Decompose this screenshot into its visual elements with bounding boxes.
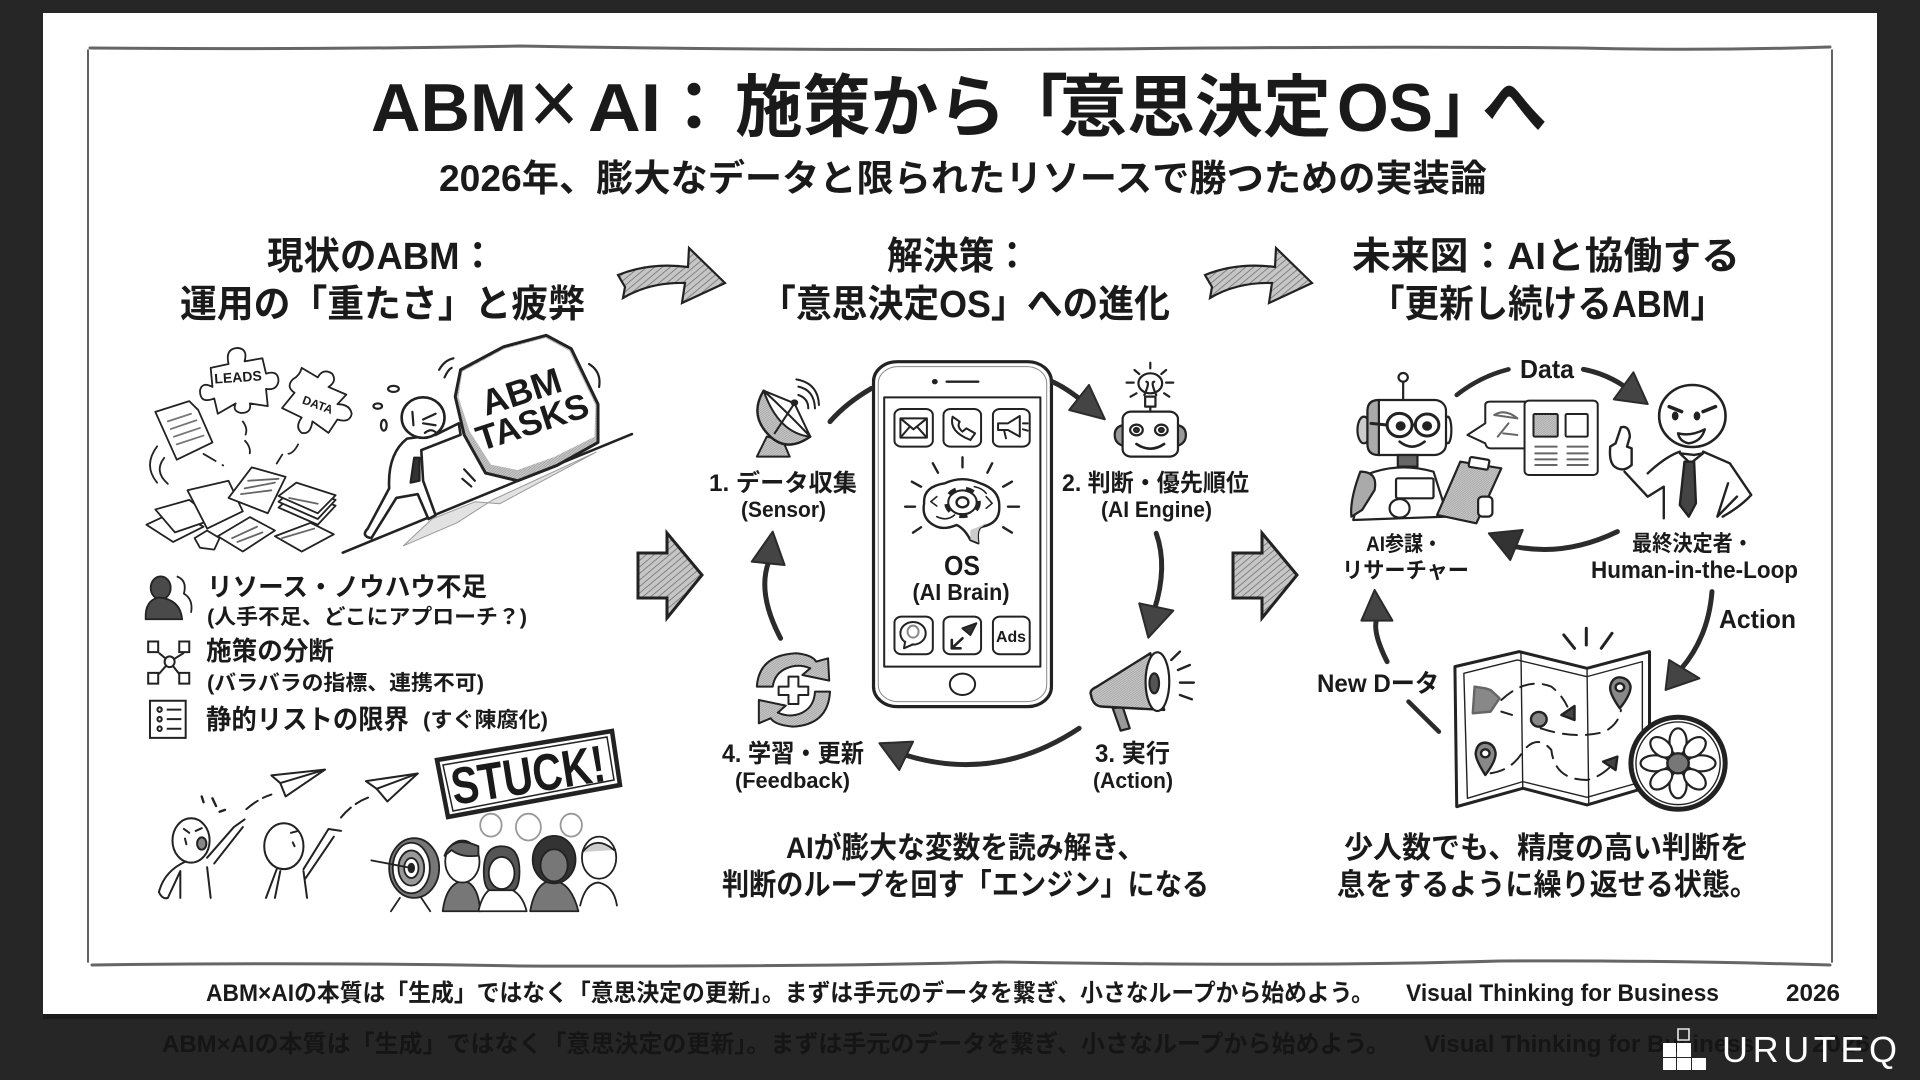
heading: future bbox=[1352, 236, 1740, 326]
caption: engine: AIが膨大な変数を読み解き、 bbox=[786, 831, 1145, 865]
illustration: person pushing boulder uphill bbox=[343, 335, 632, 553]
title: 施策から bbox=[735, 70, 1006, 146]
title bbox=[371, 52, 1547, 154]
heading: current ABM bbox=[180, 236, 585, 326]
label: step 4 bbox=[722, 740, 864, 793]
heading: current ABM: 現状のABM： bbox=[267, 236, 496, 278]
footer reflection on dark background: ABM×AIの本質は「生成」ではなく「意思決定の更新」。まずは手元のデータを繋ぎ、小さなループから始めよう。 bbox=[162, 1030, 1390, 1058]
chart bubble: dashboard bbox=[1467, 401, 1598, 475]
list item: siloed tactics: 施策の分断 bbox=[206, 636, 334, 666]
title: ： bbox=[660, 70, 728, 146]
label: OS (AI Brain): OS bbox=[944, 550, 980, 581]
icon: network bbox=[148, 641, 189, 684]
footer reflection on dark background: 2026 bbox=[1812, 1031, 1870, 1058]
logo: URUTEQ: URUTEQ bbox=[1722, 1029, 1900, 1070]
footer line: Visual Thinking for Business bbox=[1406, 980, 1719, 1007]
heading: future: 未来図：AIと協働する bbox=[1352, 236, 1740, 278]
heading: solution: 「意思決定OS」への進化 bbox=[760, 284, 1170, 326]
label: step 2: (AI Engine) bbox=[1101, 497, 1212, 522]
title: 「 bbox=[1000, 70, 1068, 146]
label: step 3: (Action) bbox=[1093, 768, 1173, 793]
label: OS (AI Brain): (AI Brain) bbox=[912, 579, 1010, 605]
hand-drawn frame bbox=[88, 46, 1832, 966]
heading: solution: 解決策： bbox=[887, 236, 1030, 278]
illustration: AI advisor robot bbox=[1351, 373, 1501, 523]
icon: satellite dish bbox=[757, 379, 819, 457]
stamp: STUCK!: STUCK! bbox=[447, 735, 609, 817]
footer line: ABM×AIの本質は「生成」ではなく「意思決定の更新」。まずは手元のデータを繋ぎ、小さなループから始めよう。 bbox=[206, 979, 1374, 1007]
caption: state bbox=[1337, 832, 1758, 902]
label: final decider bbox=[1591, 531, 1798, 584]
label: step 1: (Sensor) bbox=[741, 497, 826, 522]
label: step 3 bbox=[1093, 740, 1173, 793]
loop arrows: future cycle bbox=[1361, 369, 1712, 732]
arrow: block 2 to 3 bbox=[1233, 533, 1297, 618]
illustration: frustrated people throwing paper planes bbox=[159, 770, 418, 898]
heading: solution bbox=[760, 236, 1170, 326]
title: 」 bbox=[1433, 70, 1501, 146]
label: Action: Action bbox=[1719, 604, 1796, 634]
illustration: map with flower bbox=[1455, 628, 1725, 809]
title: × bbox=[529, 52, 579, 154]
illustration: smartphone OS bbox=[874, 362, 1051, 707]
list item: resource shortage: リソース・ノウハウ不足 bbox=[207, 572, 487, 602]
label: final decider: 最終決定者・ bbox=[1632, 531, 1753, 556]
list item: static list limit: (すぐ陳腐化) bbox=[423, 709, 548, 732]
label: step 4: (Feedback) bbox=[735, 768, 850, 793]
title: へ bbox=[1482, 70, 1547, 146]
icon: feedback cycle bbox=[757, 653, 830, 727]
label: step 4: 4. 学習・更新 bbox=[722, 740, 864, 768]
title: ABM bbox=[371, 70, 527, 146]
label: New Data: New Dータ bbox=[1317, 670, 1439, 698]
heading: future: 「更新し続けるABM」 bbox=[1370, 284, 1725, 326]
label: AI advisor: リサーチャー bbox=[1342, 558, 1469, 583]
label: final decider: Human-in-the-Loop bbox=[1591, 557, 1798, 584]
cycle arrows around phone bbox=[752, 382, 1173, 770]
label: ABM TASKS boulder: ABM bbox=[476, 359, 566, 424]
list item: static list limit: 静的リストの限界 bbox=[206, 705, 409, 735]
caption: engine: 判断のループを回す「エンジン」になる bbox=[722, 869, 1209, 902]
label: LEADS piece: LEADS bbox=[214, 367, 262, 387]
label: AI advisor bbox=[1342, 533, 1469, 583]
illustration: target and audience bbox=[371, 814, 617, 911]
icon: people bbox=[146, 576, 192, 619]
title: 意思決定 bbox=[1059, 70, 1331, 146]
subtitle: 2026年、膨大なデータと限られたリソースで勝つための実装論 bbox=[439, 157, 1487, 199]
label: Ads app: Ads bbox=[996, 629, 1026, 646]
label: ABM TASKS boulder: TASKS bbox=[471, 386, 594, 459]
illustration: scattered papers and puzzle pieces bbox=[146, 348, 352, 552]
footer line: 2026 bbox=[1786, 980, 1840, 1007]
arrow: heading 2 to 3 bbox=[1205, 248, 1312, 303]
list item: static list limit bbox=[206, 705, 548, 735]
label: Data: Data bbox=[1520, 354, 1575, 384]
caption: state: 少人数でも、精度の高い判断を bbox=[1344, 832, 1749, 865]
title: AI bbox=[588, 70, 661, 146]
list item: resource shortage bbox=[207, 572, 527, 629]
footer reflection on dark background: Visual Thinking for Business bbox=[1424, 1031, 1754, 1058]
label: OS (AI Brain) bbox=[912, 550, 1010, 605]
icon: megaphone bbox=[1091, 652, 1194, 731]
illustration: human decision maker bbox=[1610, 385, 1751, 518]
label: step 2 bbox=[1062, 470, 1249, 522]
icon: robot with light bulb bbox=[1115, 363, 1186, 457]
title: OS bbox=[1337, 70, 1433, 146]
label: step 2: 2. 判断・優先順位 bbox=[1062, 470, 1249, 497]
list item: siloed tactics: (バラバラの指標、連携不可) bbox=[207, 672, 484, 695]
panel shadow bbox=[43, 1014, 1877, 1019]
label: step 1: 1. データ収集 bbox=[709, 469, 857, 497]
arrow: block 1 to 2 bbox=[638, 533, 702, 618]
label: step 3: 3. 実行 bbox=[1095, 740, 1170, 768]
footer reflection on dark background bbox=[162, 1030, 1870, 1058]
list item: resource shortage: (人手不足、どこにアプローチ？) bbox=[207, 606, 527, 629]
heading: current ABM: 運用の「重たさ」と疲弊 bbox=[180, 284, 585, 326]
label: step 1 bbox=[709, 469, 857, 522]
label: AI advisor: AI参謀・ bbox=[1366, 533, 1442, 556]
list item: siloed tactics bbox=[206, 636, 484, 695]
caption: state: 息をするように繰り返せる状態。 bbox=[1337, 869, 1758, 902]
caption: engine bbox=[722, 831, 1209, 902]
label: DATA piece: DATA bbox=[300, 393, 335, 417]
arrow: heading 1 to 2 bbox=[618, 248, 725, 303]
icon: list bbox=[150, 701, 186, 738]
